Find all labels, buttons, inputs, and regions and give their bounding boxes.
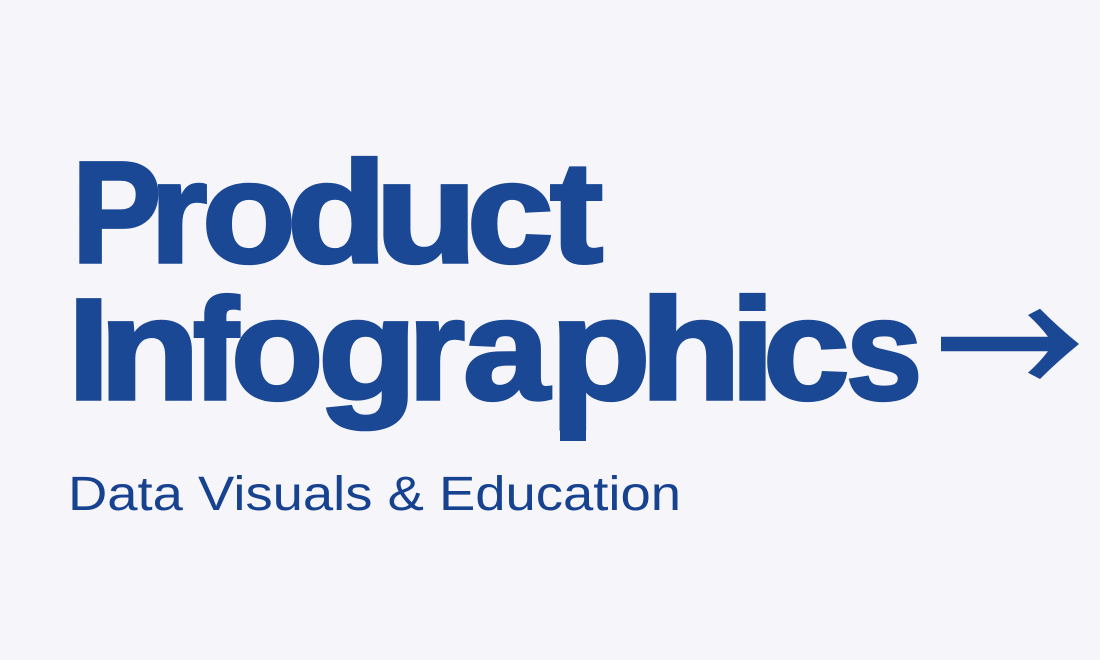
title line: Product: P [72, 132, 161, 293]
title line: Product: r [150, 132, 207, 293]
title line: Infographics: a [463, 269, 550, 430]
title line: Infographics: g [318, 269, 417, 430]
title line: Infographics: c [763, 269, 849, 430]
title line: Product: u [374, 132, 477, 293]
title line: Product: c [467, 132, 553, 293]
title line: Product: d [287, 132, 387, 293]
title line: Infographics: r [408, 269, 465, 430]
title line: Infographics: n [99, 269, 200, 430]
title line: Infographics [68, 269, 922, 441]
title line: Product: o [202, 132, 296, 293]
title [68, 132, 922, 441]
title line: Infographics: o [231, 269, 323, 430]
icon: arrow [941, 308, 1079, 379]
title line: Product [72, 132, 604, 293]
subtitle: Data Visuals & Education [68, 468, 681, 521]
title line: Product: t [550, 132, 603, 293]
title line: Infographics: f [193, 269, 238, 430]
title line: Infographics: h [640, 269, 741, 430]
title line: Infographics: i [730, 269, 775, 430]
title line: Infographics: p [550, 269, 650, 430]
title line: Infographics: I [68, 269, 110, 430]
title line: Infographics: s [846, 269, 922, 430]
